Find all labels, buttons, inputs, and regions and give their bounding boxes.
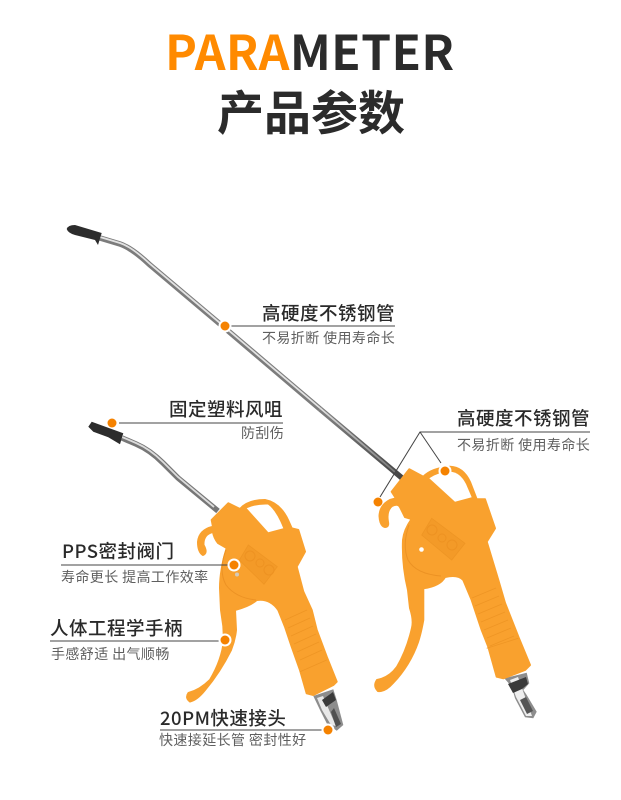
left gun disc edge [222, 550, 256, 600]
left gun body [187, 500, 337, 702]
callout: plastic stopper [108, 396, 284, 443]
right gun screw [419, 547, 424, 552]
right gun grip ribs [472, 588, 518, 648]
callout: handle: 人体工程学手柄 [50, 615, 183, 641]
callout: handle [50, 615, 232, 664]
callout: PPS valve: PPS密封阀门 [62, 538, 175, 564]
right gun ring hole [429, 472, 472, 502]
right gun disc edge [405, 525, 441, 576]
title: PARAMETER: PARAMETER [165, 14, 455, 84]
right gun logo plate [422, 518, 465, 560]
left gun connector [313, 689, 343, 731]
title: 产品参数: 产品参数 [217, 75, 405, 144]
left gun logo plate [239, 545, 277, 584]
callout: right gun steel tube [374, 405, 590, 506]
left air gun [187, 500, 343, 731]
callout: connector: 20PM快速接头 [160, 705, 286, 731]
short tube [122, 437, 218, 511]
left gun grip ribs [285, 610, 327, 672]
short tube black tip [88, 422, 123, 444]
callout: handle: 手感舒适 出气顺畅 [51, 644, 170, 664]
right air gun [375, 467, 537, 718]
right gun body [375, 467, 530, 691]
left gun screw [235, 572, 239, 576]
callout: long tube: 不易折断 使用寿命长 [262, 328, 395, 348]
long tube [100, 237, 402, 478]
left gun ring hole [247, 504, 283, 532]
callout: PPS valve [61, 538, 240, 587]
callout: right gun steel tube: 高硬度不锈钢管 [457, 405, 590, 431]
callout: connector: 快速接延长管 密封性好 [159, 730, 307, 750]
callout: long tube [218, 300, 395, 348]
callout: plastic stopper: 固定塑料风咀 [169, 396, 283, 422]
callout: right gun steel tube: 不易折断 使用寿命长 [457, 435, 590, 455]
callout: plastic stopper: 防刮伤 [241, 423, 284, 443]
callout: long tube: 高硬度不锈钢管 [262, 300, 395, 326]
callout: PPS valve: 寿命更长 提高工作效率 [61, 567, 209, 587]
callout: connector [159, 705, 334, 750]
long tube black tip [67, 225, 102, 245]
right gun connector [504, 673, 537, 718]
